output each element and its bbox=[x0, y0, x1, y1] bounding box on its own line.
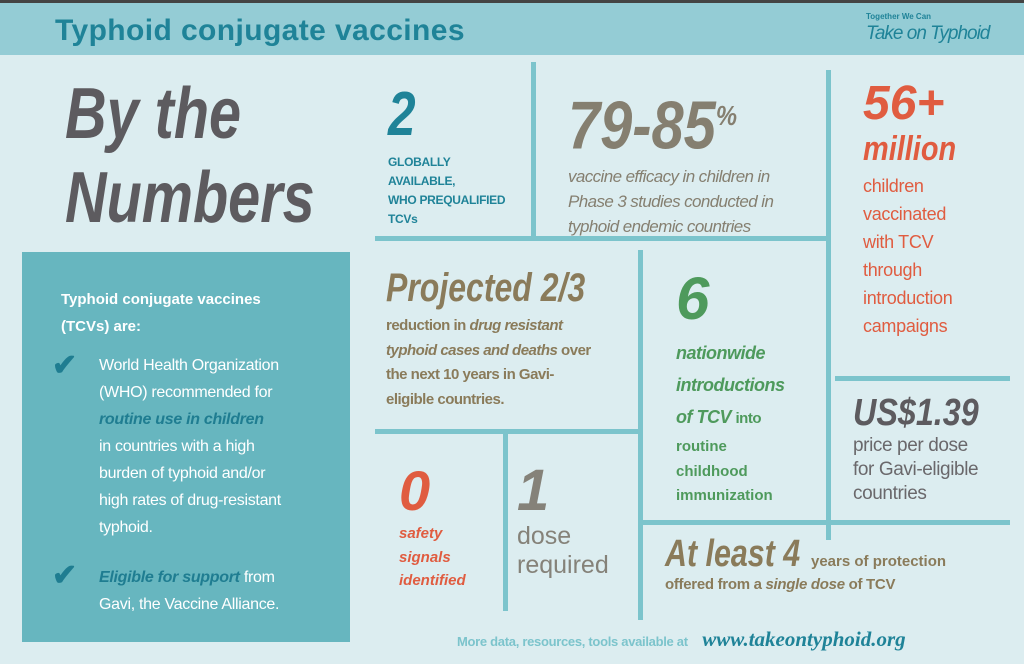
logo: Take on Typhoid bbox=[866, 23, 989, 44]
footer: More data, resources, tools available at www.takeontyphoid.org bbox=[457, 627, 906, 651]
panel heading: (TCVs) are: bbox=[61, 318, 141, 335]
stat: 56+ million: 56+ bbox=[863, 77, 944, 130]
stat: 56+ million: children bbox=[863, 176, 924, 196]
stat: Projected 2/3: eligible countries. bbox=[386, 390, 504, 408]
stat: 56+ million: vaccinated bbox=[863, 204, 946, 224]
text: WHO: World Health Organization bbox=[99, 357, 279, 374]
text: WHO: in countries with a high bbox=[99, 438, 255, 455]
header band bbox=[0, 3, 1024, 55]
top dark strip bbox=[0, 0, 1024, 3]
stat: US$1.39: US$1.39 bbox=[853, 392, 979, 434]
stat: 56+ million: campaigns bbox=[863, 316, 947, 336]
stat: US$1.39: price per dose bbox=[853, 435, 968, 456]
icon: check 2: ✔ bbox=[52, 559, 77, 592]
panel: TCV info bbox=[22, 252, 350, 642]
stat: 0 safety signals: 0 bbox=[399, 459, 430, 522]
stat: Projected 2/3: typhoid cases and deaths over bbox=[386, 342, 591, 358]
stat: 6 introductions bbox=[676, 265, 784, 504]
stat: 0 safety signals bbox=[399, 459, 466, 589]
stat: 6 introductions: immunization bbox=[676, 487, 773, 504]
stat: 0 safety signals: identified bbox=[399, 572, 466, 589]
stat: 6 introductions: nationwide bbox=[676, 343, 765, 363]
panel heading: Typhoid conjugate vaccines bbox=[61, 291, 261, 308]
logo bbox=[866, 12, 991, 44]
stat: 56+ million bbox=[863, 77, 956, 336]
stat: 6 introductions: routine bbox=[676, 438, 727, 455]
stat: 2 TCVs: AVAILABLE, bbox=[388, 174, 455, 188]
stat: 1 dose bbox=[517, 458, 609, 579]
stat: At least 4 years bbox=[664, 533, 946, 593]
stat: 56+ million: with TCV bbox=[863, 232, 933, 252]
stat: Projected 2/3: Projected 2/3 bbox=[386, 266, 585, 310]
text: Gavi: Gavi, the Vaccine Alliance. bbox=[99, 596, 279, 613]
stat: 2 TCVs: TCVs bbox=[388, 212, 417, 226]
stat: 79-85%: 79-85% bbox=[568, 88, 737, 164]
stat: At least 4 years: At least 4 bbox=[665, 533, 800, 575]
stat: US$1.39: countries bbox=[853, 483, 926, 504]
stat: 79-85%: vaccine efficacy in children in bbox=[568, 167, 770, 186]
stat: 2 TCVs bbox=[387, 80, 506, 226]
title: Typhoid conjugate vaccines bbox=[55, 14, 465, 47]
stat: At least 4 years: years of protection bbox=[811, 553, 946, 570]
stat: 56+ million: through bbox=[863, 260, 922, 280]
stat: 6 introductions: 6 bbox=[676, 265, 709, 332]
stat: 1 dose: 1 bbox=[517, 458, 549, 523]
text: WHO: high rates of drug-resistant bbox=[99, 492, 281, 509]
stat: 56+ million: introduction bbox=[863, 288, 952, 308]
heading: By the Numbers bbox=[65, 74, 315, 238]
stat: Projected 2/3: reduction in drug resistant bbox=[386, 317, 563, 334]
stat: 56+ million: million bbox=[863, 130, 956, 168]
stat: 79-85%: Phase 3 studies conducted in bbox=[568, 192, 773, 211]
text: Gavi: Eligible for support from bbox=[99, 569, 275, 586]
stat: 1 dose: dose bbox=[517, 522, 571, 550]
stat: 6 introductions: of TCV into bbox=[676, 407, 761, 427]
text: WHO: typhoid. bbox=[99, 519, 153, 536]
stat: 6 introductions: childhood bbox=[676, 462, 748, 480]
stat: Projected 2/3 bbox=[386, 266, 591, 408]
text: WHO bbox=[99, 357, 282, 536]
stat: 79-85% bbox=[568, 88, 774, 236]
text: Gavi bbox=[99, 569, 279, 613]
stat: US$1.39: for Gavi-eligible bbox=[853, 459, 978, 480]
stat: 2 TCVs: 2 bbox=[388, 80, 416, 149]
stat: 2 TCVs: GLOBALLY bbox=[388, 155, 450, 169]
heading: By the Numbers: By the bbox=[65, 74, 241, 154]
stat: US$1.39 bbox=[853, 392, 979, 504]
heading: By the Numbers: Numbers bbox=[65, 158, 315, 238]
text: WHO: routine use in children bbox=[99, 411, 264, 428]
stat: 2 TCVs: WHO PREQUALIFIED bbox=[388, 193, 505, 207]
stat: 1 dose: required bbox=[517, 551, 609, 579]
logo: Together We Can bbox=[866, 12, 931, 21]
stat: Projected 2/3: the next 10 years in Gavi- bbox=[386, 366, 554, 383]
stat: 0 safety signals: safety bbox=[399, 525, 442, 542]
stat: 6 introductions: introductions bbox=[676, 375, 784, 395]
panel heading bbox=[61, 291, 261, 335]
stat: 0 safety signals: signals bbox=[399, 548, 451, 566]
stat: At least 4 years: offered from a single dose of TCV bbox=[665, 576, 895, 593]
text: WHO: (WHO) recommended for bbox=[99, 384, 272, 401]
icon: check 1: ✔ bbox=[52, 349, 77, 382]
stat: 79-85%: typhoid endemic countries bbox=[568, 217, 751, 236]
text: WHO: burden of typhoid and/or bbox=[99, 465, 265, 482]
